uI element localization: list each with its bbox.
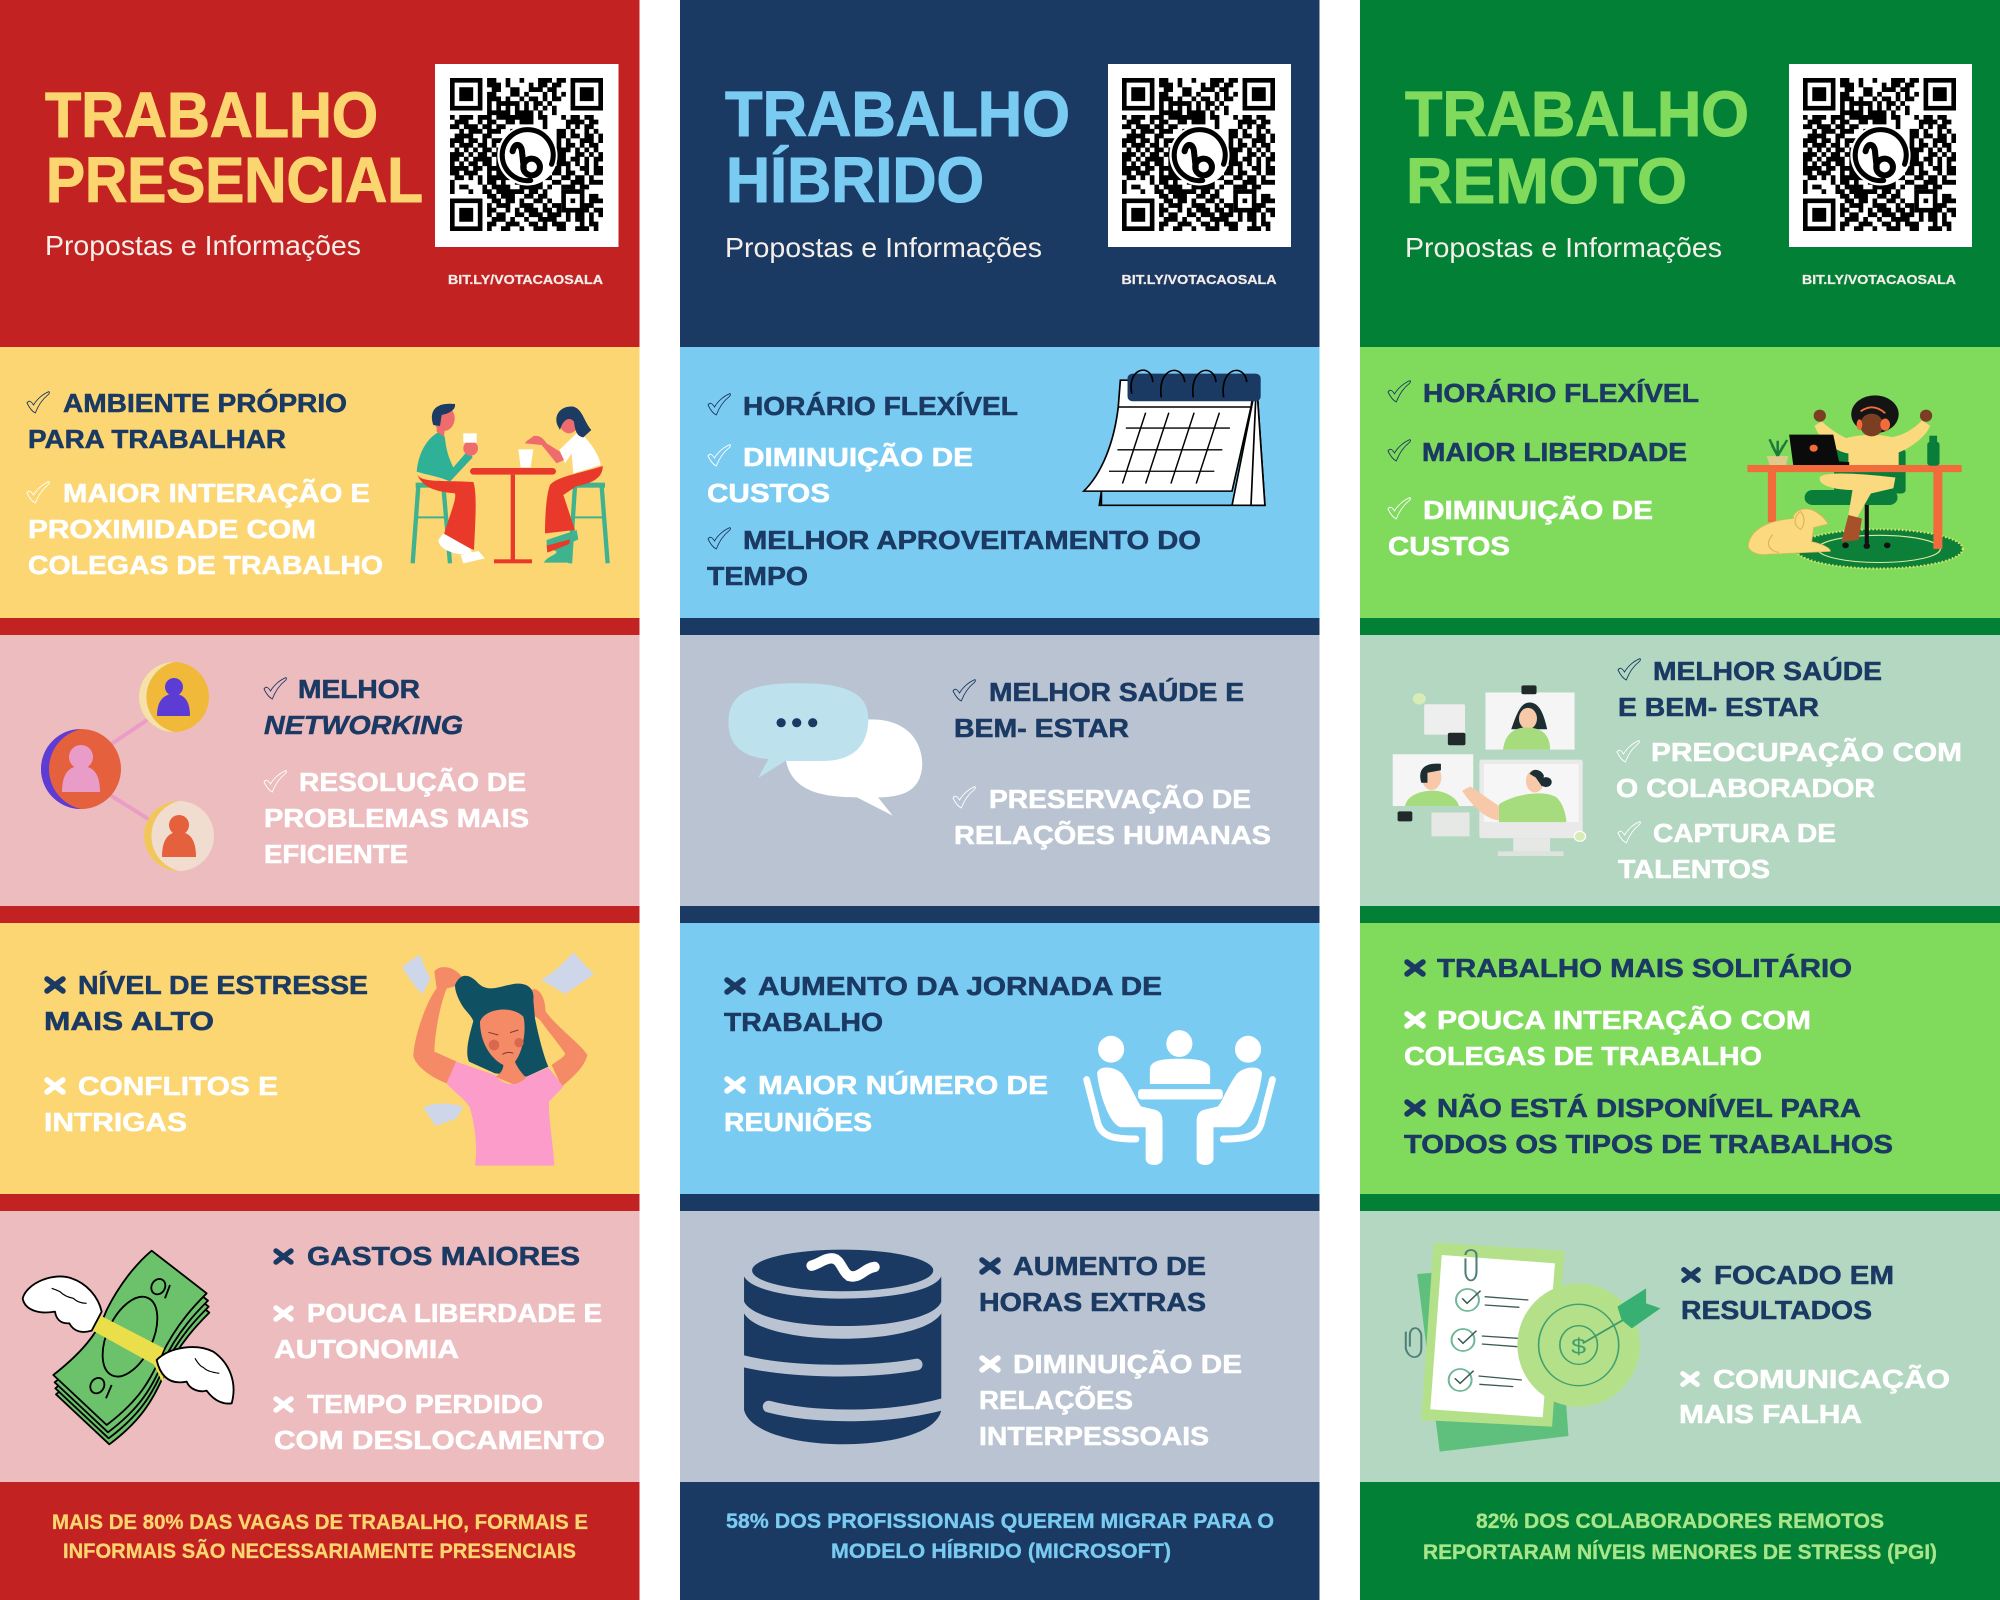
- text: horário, liberdade, custos: DIMINUIÇÃO DE: [1423, 495, 1653, 525]
- text: estresse e conflitos: [44, 970, 368, 1137]
- text: jornada e reuniões: REUNIÕES: [724, 1107, 872, 1137]
- text: resultados e comunicação: COMUNICAÇÃO: [1713, 1364, 1950, 1394]
- text: horas extras e relações: AUMENTO DE: [1013, 1251, 1206, 1281]
- icon: video call: [1393, 685, 1586, 856]
- text: networking e problemas: RESOLUÇÃO DE: [299, 767, 526, 797]
- text: solidão, interação, disponibilidade: NÃO ESTÁ DISPONÍVEL PARA: [1437, 1093, 1861, 1123]
- text: saúde, colaborador, talentos: [1616, 656, 1962, 884]
- panel: footer híbrido: [680, 1482, 1320, 1600]
- footer statistic: MAIS DE 80% DAS VAGAS DE TRABALHO, FORMAIS E: [52, 1511, 588, 1534]
- column: trabalho híbrido: [680, 0, 1320, 1600]
- text: horário, liberdade, custos: HORÁRIO FLEXÍVEL: [1423, 378, 1699, 408]
- title: trabalho remoto: [1405, 78, 1749, 217]
- text: solidão, interação, disponibilidade: POUCA INTERAÇÃO COM: [1437, 1005, 1811, 1035]
- icon: chat bubbles: [728, 683, 922, 816]
- text: ambiente e interação: [27, 388, 383, 580]
- title: trabalho remoto: REMOTO: [1406, 145, 1687, 217]
- text: ambiente e interação: PROXIMIDADE COM: [28, 514, 316, 544]
- icon: woman meditating at desk with dog: [1747, 395, 1963, 569]
- text: gastos, liberdade, deslocamento: POUCA LIBERDADE E: [307, 1298, 602, 1328]
- text: ambiente e interação: MAIOR INTERAÇÃO E: [63, 478, 370, 508]
- subtitle: Propostas e Informações: [45, 230, 361, 261]
- divider bar: [680, 906, 1320, 923]
- text: networking e problemas: PROBLEMAS MAIS: [264, 803, 529, 833]
- divider bar: [0, 906, 640, 923]
- footer statistic: [52, 1511, 588, 1563]
- text: saúde, colaborador, talentos: TALENTOS: [1618, 854, 1770, 884]
- panel: vantagens ambiente: [0, 347, 640, 618]
- text: horário, custos, tempo: MELHOR APROVEITAMENTO DO: [743, 525, 1201, 555]
- text: jornada e reuniões: [724, 971, 1162, 1137]
- text: horário, liberdade, custos: CUSTOS: [1388, 531, 1510, 561]
- divider bar: [0, 618, 640, 635]
- text: saúde e relações humanas: BEM- ESTAR: [954, 713, 1129, 743]
- title: trabalho presencial: PRESENCIAL: [46, 144, 423, 216]
- panel: desvantagens horas extras: [680, 1211, 1320, 1482]
- qr code: [435, 64, 618, 247]
- panel: desvantagens comunicação: [1360, 1211, 2000, 1482]
- text: estresse e conflitos: CONFLITOS E: [78, 1071, 278, 1101]
- text: saúde, colaborador, talentos: CAPTURA DE: [1653, 818, 1836, 848]
- column: trabalho remoto: [1360, 0, 2000, 1600]
- text: gastos, liberdade, deslocamento: GASTOS MAIORES: [307, 1241, 580, 1271]
- text: ambiente e interação: AMBIENTE PRÓPRIO: [63, 388, 347, 418]
- text: networking e problemas: EFICIENTE: [264, 839, 408, 869]
- text: saúde, colaborador, talentos: PREOCUPAÇÃO COM: [1651, 737, 1962, 767]
- panel: vantagens saúde: [680, 635, 1320, 906]
- text: horário, custos, tempo: DIMINUIÇÃO DE: [743, 442, 973, 472]
- footer statistic: REPORTARAM NÍVEIS MENORES DE STRESS (PGI): [1423, 1541, 1937, 1564]
- panel: vantagens networking: [0, 635, 640, 906]
- qr link: BIT.LY/VOTACAOSALA: [448, 272, 604, 287]
- text: solidão, interação, disponibilidade: TRABALHO MAIS SOLITÁRIO: [1437, 953, 1852, 983]
- panel: desvantagens gastos: [0, 1211, 640, 1482]
- text: jornada e reuniões: MAIOR NÚMERO DE: [758, 1070, 1048, 1100]
- text: saúde, colaborador, talentos: E BEM- ESTAR: [1618, 692, 1819, 722]
- text: gastos, liberdade, deslocamento: TEMPO PERDIDO: [307, 1389, 543, 1419]
- text: horário, custos, tempo: CUSTOS: [707, 478, 830, 508]
- icon: checklist and target: [1406, 1243, 1660, 1452]
- text: horas extras e relações: DIMINUIÇÃO DE: [1013, 1349, 1242, 1379]
- footer statistic: [1423, 1510, 1937, 1564]
- footer statistic: 58% DOS PROFISSIONAIS QUEREM MIGRAR PARA O: [726, 1510, 1274, 1533]
- icon: two people at a table: [413, 404, 608, 563]
- text: jornada e reuniões: TRABALHO: [724, 1007, 883, 1037]
- text: ambiente e interação: PARA TRABALHAR: [28, 424, 286, 454]
- title: trabalho presencial: TRABALHO: [45, 79, 378, 151]
- text: jornada e reuniões: AUMENTO DA JORNADA DE: [758, 971, 1162, 1001]
- text: horário, custos, tempo: TEMPO: [707, 561, 808, 591]
- panel: footer presencial: [0, 1482, 640, 1600]
- text: solidão, interação, disponibilidade: COLEGAS DE TRABALHO: [1404, 1041, 1762, 1071]
- text: gastos, liberdade, deslocamento: AUTONOMIA: [274, 1334, 459, 1364]
- title: trabalho presencial: [45, 79, 423, 216]
- divider bar: [0, 1194, 640, 1211]
- column: trabalho presencial: [0, 0, 640, 1600]
- text: networking e problemas: [264, 674, 529, 869]
- text: resultados e comunicação: MAIS FALHA: [1679, 1399, 1862, 1429]
- footer statistic: 82% DOS COLABORADORES REMOTOS: [1476, 1510, 1884, 1533]
- qr code: [1789, 64, 1972, 247]
- text: horário, liberdade, custos: [1388, 378, 1699, 561]
- panel: desvantagens jornada: [680, 923, 1320, 1194]
- text: estresse e conflitos: NÍVEL DE ESTRESSE: [78, 970, 368, 1000]
- footer statistic: MODELO HÍBRIDO (MICROSOFT): [831, 1540, 1171, 1563]
- icon: network of people: [41, 662, 214, 871]
- text: networking e problemas: MELHOR: [298, 674, 420, 704]
- title: trabalho híbrido: HÍBRIDO: [726, 144, 984, 216]
- panel: vantagens saúde remoto: [1360, 635, 2000, 906]
- panel: desvantagens solidão: [1360, 923, 2000, 1194]
- divider bar: [1360, 1194, 2000, 1211]
- panel: vantagens liberdade: [1360, 347, 2000, 618]
- icon: stack of coins: [739, 1250, 945, 1444]
- text: horas extras e relações: RELAÇÕES: [979, 1385, 1133, 1415]
- footer statistic: [726, 1510, 1274, 1563]
- subtitle: Propostas e Informações: [725, 232, 1042, 263]
- text: resultados e comunicação: [1679, 1260, 1950, 1429]
- qr link: BIT.LY/VOTACAOSALA: [1122, 272, 1277, 287]
- text: horas extras e relações: HORAS EXTRAS: [979, 1287, 1206, 1317]
- icon: stressed woman: [402, 952, 594, 1166]
- text: estresse e conflitos: MAIS ALTO: [44, 1006, 214, 1036]
- panel: header híbrido: [680, 0, 1320, 347]
- text: saúde e relações humanas: MELHOR SAÚDE E: [989, 677, 1244, 707]
- divider bar: [1360, 618, 2000, 635]
- icon: calendar: [1084, 370, 1265, 505]
- text: resultados e comunicação: FOCADO EM: [1714, 1260, 1894, 1290]
- title: trabalho híbrido: [725, 78, 1070, 216]
- title: trabalho híbrido: TRABALHO: [725, 78, 1070, 150]
- panel: header presencial: [0, 0, 640, 347]
- divider bar: [680, 618, 1320, 635]
- qr code: [1108, 64, 1291, 247]
- subtitle: Propostas e Informações: [1405, 232, 1722, 263]
- text: gastos, liberdade, deslocamento: [274, 1241, 605, 1455]
- divider bar: [680, 1194, 1320, 1211]
- footer statistic: INFORMAIS SÃO NECESSARIAMENTE PRESENCIAIS: [63, 1540, 576, 1563]
- text: solidão, interação, disponibilidade: [1404, 953, 1893, 1159]
- text: saúde e relações humanas: RELAÇÕES HUMANAS: [954, 820, 1271, 850]
- divider bar: [1360, 906, 2000, 923]
- text: gastos, liberdade, deslocamento: COM DESLOCAMENTO: [274, 1425, 605, 1455]
- text: horas extras e relações: [979, 1251, 1242, 1451]
- qr link: BIT.LY/VOTACAOSALA: [1802, 272, 1957, 287]
- text: horário, liberdade, custos: MAIOR LIBERDADE: [1422, 437, 1687, 467]
- text: resultados e comunicação: RESULTADOS: [1681, 1295, 1872, 1325]
- panel: footer remoto: [1360, 1482, 2000, 1600]
- panel: vantagens horário: [680, 347, 1320, 618]
- text: networking e problemas: NETWORKING: [264, 710, 463, 740]
- text: horário, custos, tempo: HORÁRIO FLEXÍVEL: [743, 391, 1018, 421]
- panel: desvantagens estresse: [0, 923, 640, 1194]
- icon: checklist and target: $: [1571, 1335, 1586, 1359]
- text: saúde, colaborador, talentos: MELHOR SAÚDE: [1653, 656, 1882, 686]
- text: solidão, interação, disponibilidade: TODOS OS TIPOS DE TRABALHOS: [1404, 1129, 1893, 1159]
- text: estresse e conflitos: INTRIGAS: [44, 1107, 187, 1137]
- text: ambiente e interação: COLEGAS DE TRABALHO: [28, 550, 383, 580]
- panel: header remoto: [1360, 0, 2000, 347]
- title: trabalho remoto: TRABALHO: [1405, 78, 1749, 150]
- text: saúde e relações humanas: [953, 677, 1271, 850]
- text: saúde, colaborador, talentos: O COLABORADOR: [1616, 773, 1875, 803]
- text: horas extras e relações: INTERPESSOAIS: [979, 1421, 1209, 1451]
- icon: money with wings: [23, 1251, 234, 1444]
- text: horário, custos, tempo: [707, 391, 1201, 591]
- text: saúde e relações humanas: PRESERVAÇÃO DE: [989, 784, 1251, 814]
- icon: meeting table: [1087, 1030, 1272, 1165]
